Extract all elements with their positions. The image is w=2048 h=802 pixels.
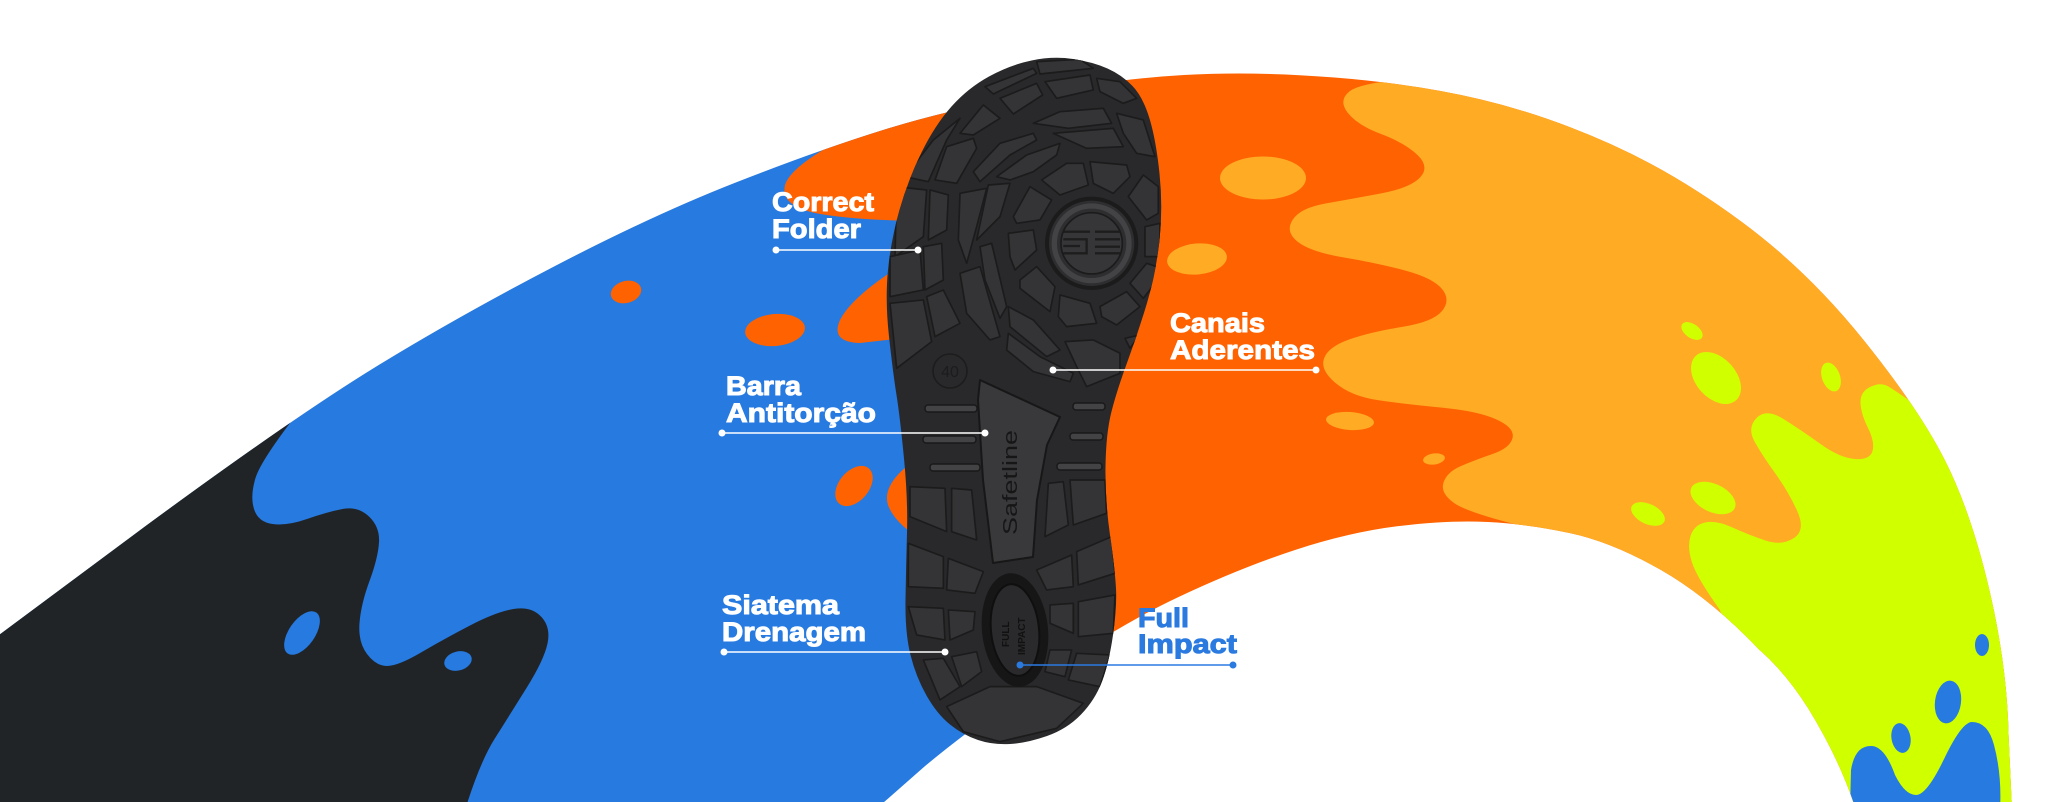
droplets: blue on lime	[1889, 634, 1989, 754]
droplets: amber on orange	[1166, 156, 1446, 466]
callout: Canais Aderentes	[1050, 308, 1320, 374]
arch bars	[923, 403, 1105, 471]
ribbon: blue band	[0, 112, 965, 802]
forefoot tread lugs	[890, 59, 1160, 387]
droplets: orange on blue	[608, 277, 880, 513]
ribbon: black splash	[0, 400, 548, 802]
brand text: Safetline	[1000, 430, 1022, 535]
callout: Siatema Drenagem	[720, 590, 948, 656]
sole outline	[887, 58, 1161, 744]
droplets: blue on black	[277, 605, 474, 674]
logo medallion	[1045, 197, 1138, 290]
callout: Barra Antitorção	[718, 371, 988, 436]
full impact heel pod: IMPACT	[1017, 617, 1028, 655]
callout: Full Impact: Impact	[1138, 629, 1237, 659]
callout: Full Impact	[1016, 603, 1237, 668]
pod text: FULL	[1001, 621, 1012, 647]
callout: Siatema Drenagem: Siatema	[722, 590, 840, 620]
shoe sole	[887, 58, 1161, 744]
ribbon: orange lobe middle	[838, 274, 890, 343]
ribbon: orange band	[1105, 74, 2012, 802]
full impact heel pod	[976, 570, 1054, 690]
ribbon: orange lobe top	[784, 112, 946, 220]
size mark 40	[933, 354, 967, 388]
callout: Canais Aderentes: Canais	[1170, 308, 1265, 338]
ribbon: orange lobe lower	[886, 468, 908, 530]
callout: Full Impact: Full	[1138, 603, 1189, 633]
torsion bar plate	[978, 380, 1060, 563]
droplets: lime on amber	[1627, 318, 1845, 531]
callout: Barra Antitorção: Barra	[726, 371, 802, 401]
ribbon: lime band	[1689, 384, 2012, 802]
callout: Canais Aderentes: Aderentes	[1170, 335, 1315, 365]
callout: Correct Folder: Folder	[772, 214, 862, 244]
heel tread lugs	[908, 480, 1115, 742]
callout: Barra Antitorção: Antitorção	[726, 398, 876, 428]
callout: Correct Folder	[772, 187, 922, 254]
ribbon: blue end splash	[1850, 722, 2000, 802]
ribbon: amber band	[1290, 82, 2012, 802]
callout: Correct Folder: Correct	[772, 187, 874, 217]
callout: Siatema Drenagem: Drenagem	[722, 617, 866, 647]
size mark 40: 40	[941, 364, 959, 381]
